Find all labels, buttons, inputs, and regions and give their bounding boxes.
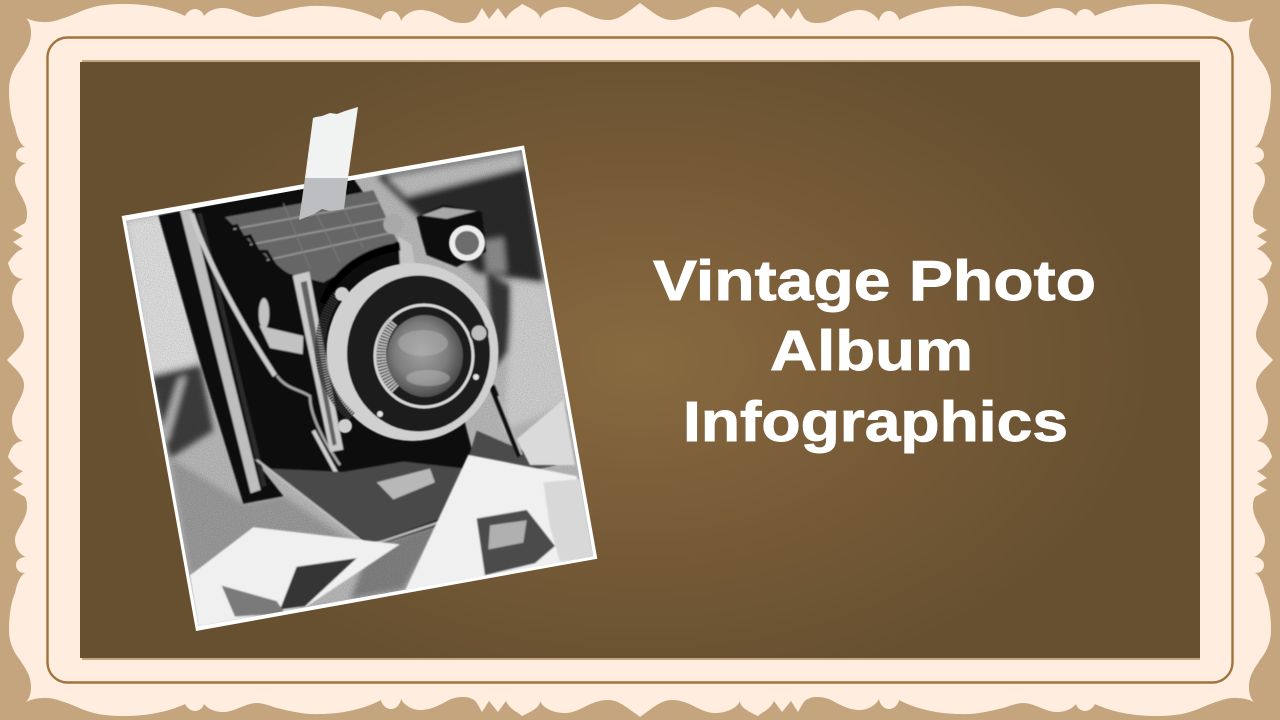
base plate	[267, 462, 463, 544]
viewfinder lens	[449, 225, 485, 261]
title	[653, 249, 1096, 454]
right leg	[492, 386, 520, 456]
knob and bracket	[383, 214, 403, 234]
prints on table	[190, 400, 594, 627]
strut arm	[192, 214, 275, 376]
viewfinder	[417, 205, 486, 267]
brown gradient panel	[80, 60, 1200, 660]
bellows	[225, 190, 397, 283]
camera body	[158, 179, 557, 548]
title: Album	[770, 319, 973, 383]
photo image	[126, 150, 594, 626]
tilted photo of vintage camera	[122, 146, 598, 631]
washi tape	[299, 107, 358, 220]
photo white border	[122, 146, 597, 631]
title: Vintage Photo	[653, 249, 1096, 313]
shutter rings and lens	[320, 225, 498, 441]
title: Infographics	[683, 390, 1068, 454]
